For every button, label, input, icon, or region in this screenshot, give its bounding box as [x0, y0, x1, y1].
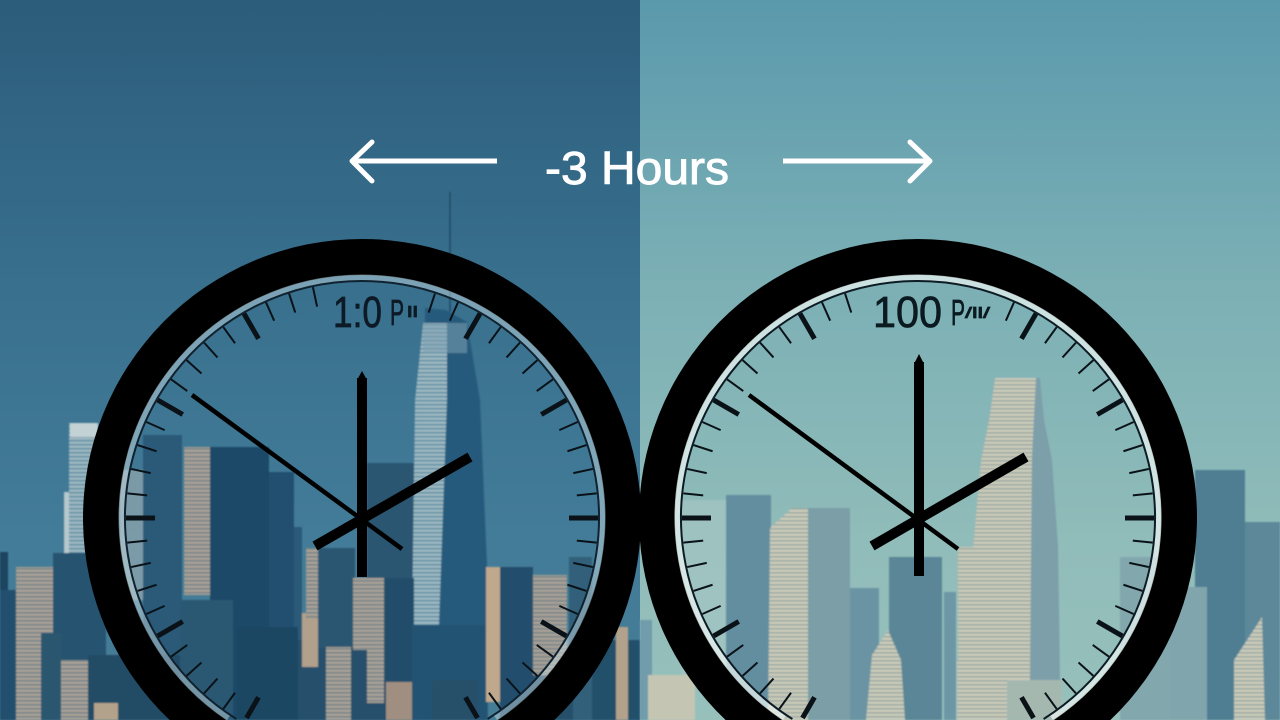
clock hands: left — [192, 371, 470, 577]
clock time label: right — [873, 288, 991, 337]
panel: left darker sky — [0, 0, 640, 720]
clock track: right — [681, 281, 1155, 719]
clock time label: left: ll — [407, 304, 418, 321]
clock ticks: left — [126, 287, 598, 718]
panel: right lighter sky — [640, 0, 1280, 720]
clock time label: left: 1:0 — [333, 288, 382, 337]
right skyline — [640, 378, 1280, 720]
clock ticks: right — [682, 294, 1154, 718]
title: time difference: -3 Hours — [545, 142, 729, 194]
clock inner band: right — [677, 278, 1158, 718]
clock ring: left — [83, 239, 641, 720]
clock time label: right: 100 — [873, 288, 942, 337]
arrow: right — [783, 142, 930, 181]
clock hands: right — [749, 354, 1026, 576]
left clock — [83, 239, 641, 720]
clock time label: right: /ll/ — [965, 305, 991, 322]
right clock — [639, 239, 1197, 720]
clock inner band: left — [121, 278, 602, 718]
left skyline — [0, 192, 640, 720]
clock time label: left: P — [390, 292, 404, 333]
clock ring: right — [639, 239, 1197, 720]
clock time label: right: P — [951, 292, 965, 333]
clock track: left — [125, 281, 599, 719]
arrow: left — [352, 142, 497, 181]
